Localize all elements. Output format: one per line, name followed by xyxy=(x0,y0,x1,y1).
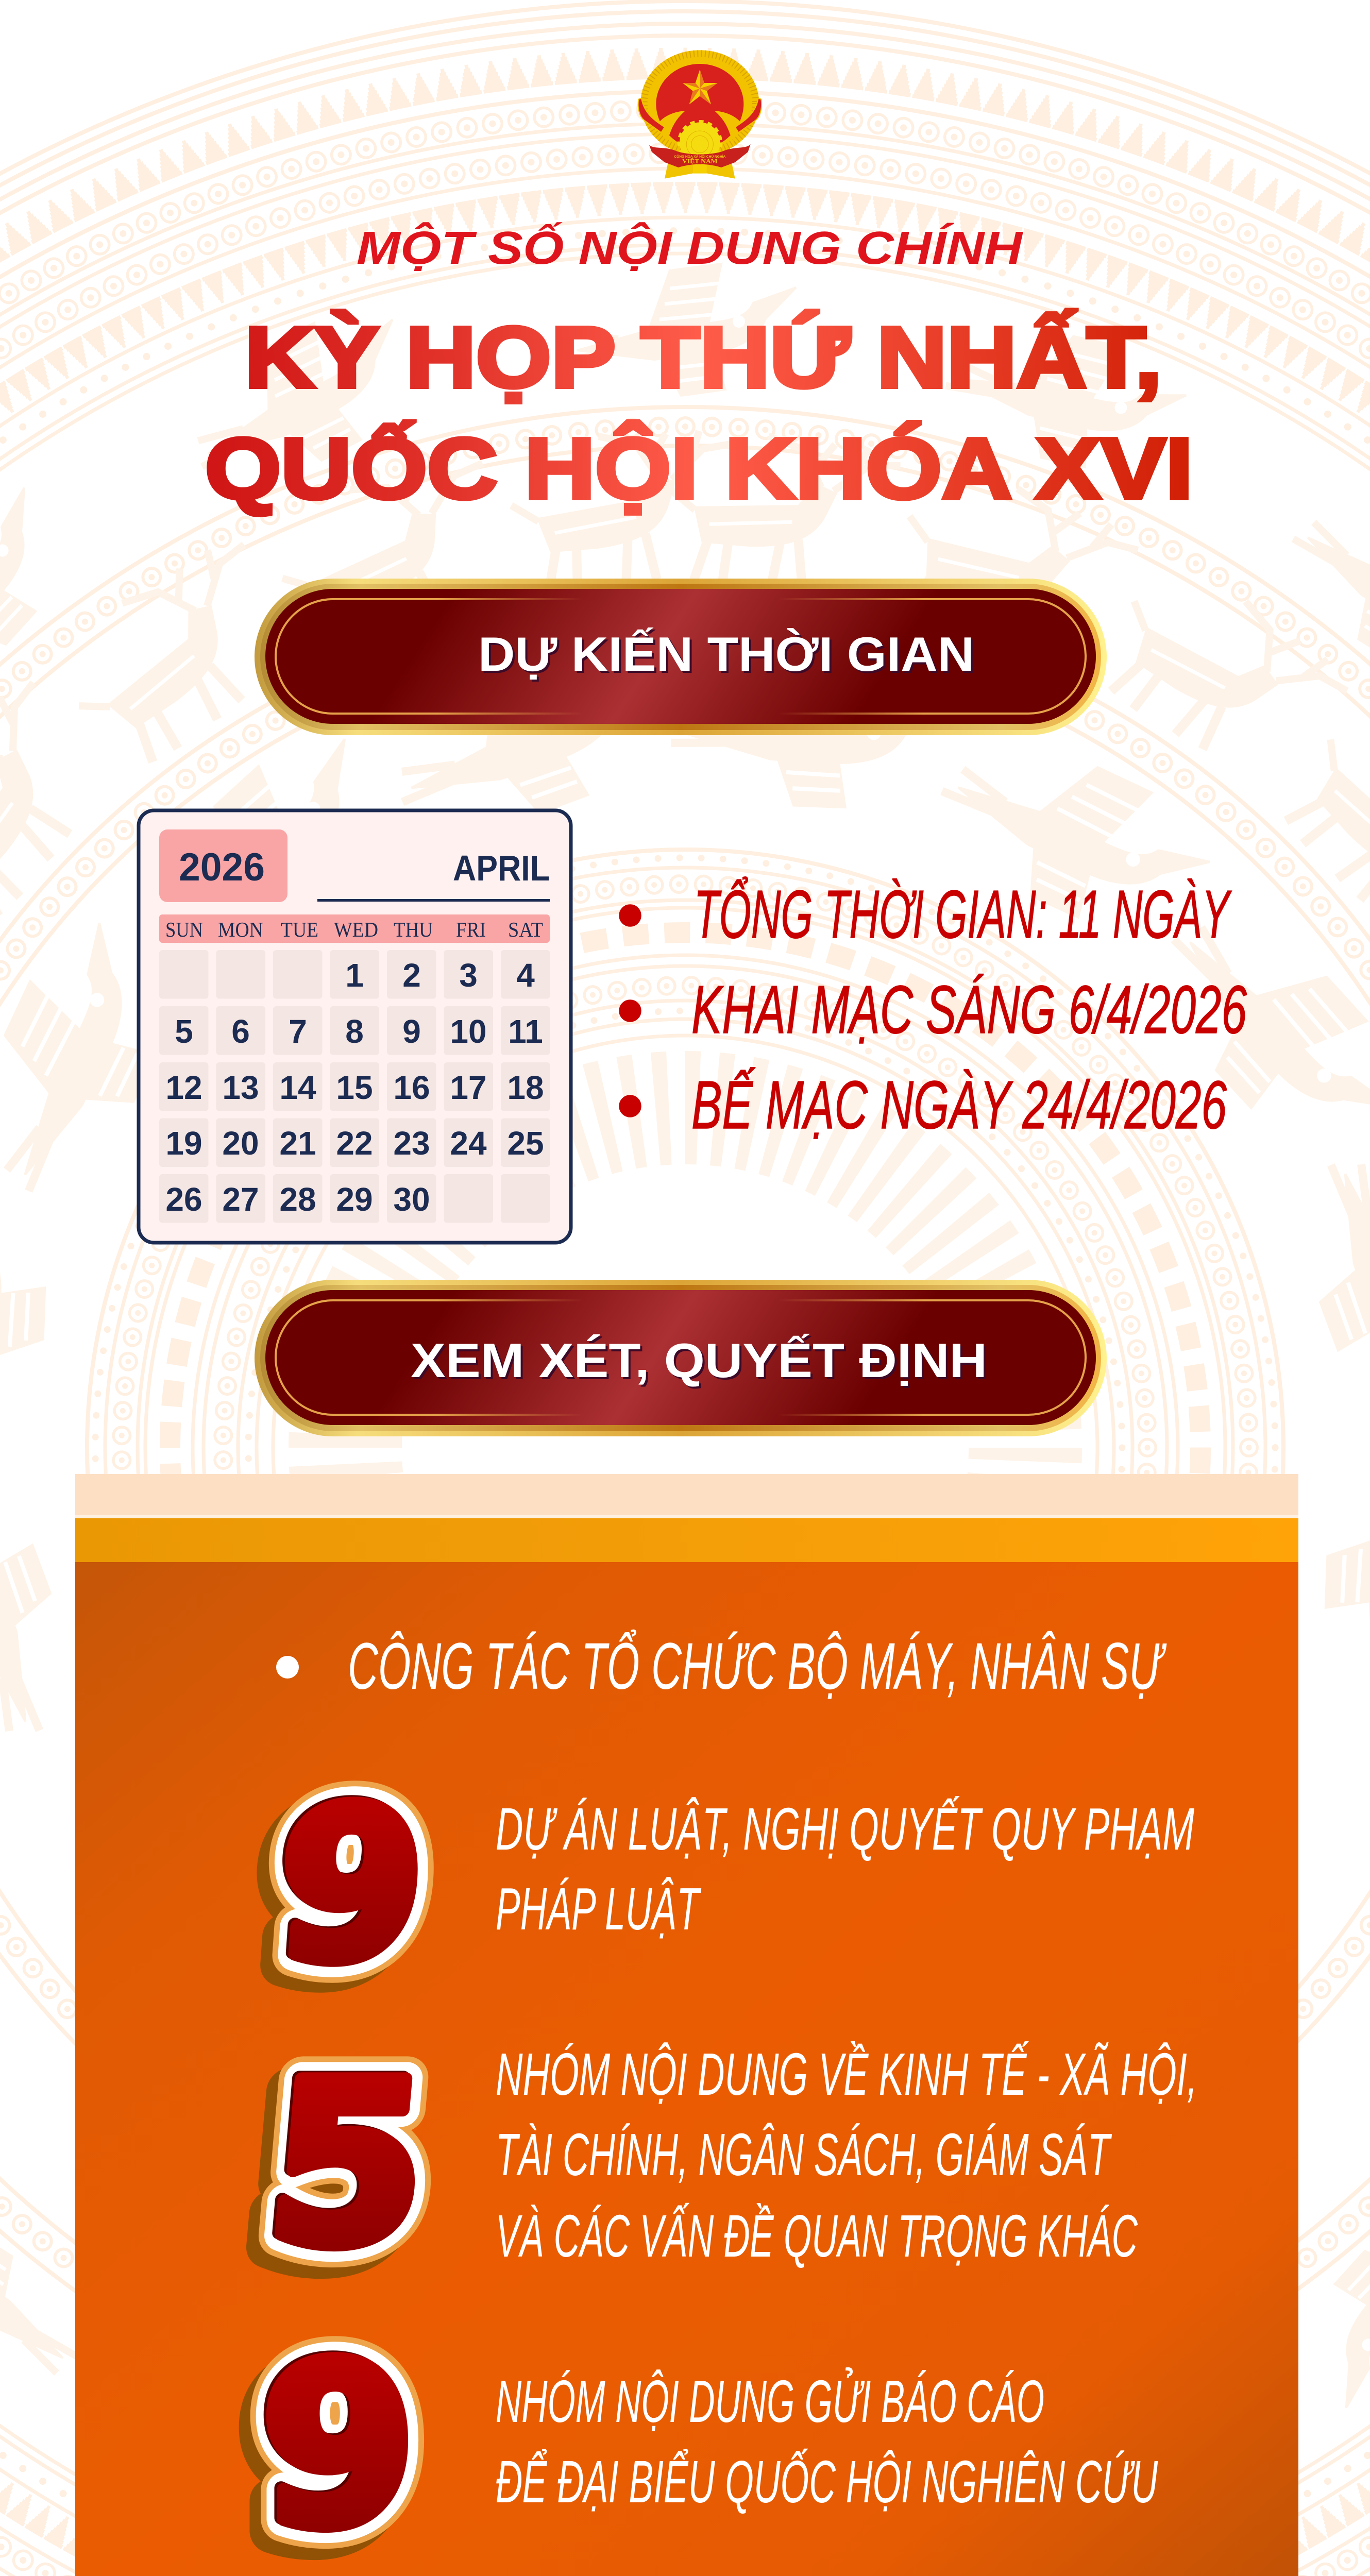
day numbers: 24 xyxy=(450,1125,487,1162)
day numbers: 17 xyxy=(450,1069,487,1106)
weekday header xyxy=(159,914,550,943)
day numbers: 4 xyxy=(516,957,535,994)
title: KỲ HỌP THỨ NHẤT, xyxy=(245,310,1162,405)
section banner: review and decide: XEM XÉT, QUYẾT ĐỊNH xyxy=(413,1335,989,1389)
icon: national emblem of Vietnam xyxy=(638,50,762,179)
day numbers: 25 xyxy=(507,1125,544,1162)
text: report groups xyxy=(496,2367,1158,2515)
numeral 9: draft laws: 9 xyxy=(270,1765,432,2007)
section banner: timing xyxy=(255,579,1107,735)
section banner: review and decide xyxy=(255,1280,1107,1436)
day numbers: 20 xyxy=(222,1125,259,1162)
day numbers: 26 xyxy=(165,1181,202,1218)
day numbers: 30 xyxy=(393,1181,430,1218)
weekday header: MON xyxy=(218,918,263,941)
day numbers: 22 xyxy=(336,1125,373,1162)
year tag xyxy=(159,829,287,902)
day numbers: 18 xyxy=(507,1069,544,1106)
day numbers: 10 xyxy=(450,1013,487,1050)
day numbers: 23 xyxy=(393,1125,430,1162)
numeral 9: report groups: 9 xyxy=(261,2318,416,2575)
section banner: timing: DỰ KIẾN THỜI GIAN xyxy=(480,629,976,683)
numeral 5: socio-economic groups: 5 xyxy=(259,2035,437,2295)
section banner: review and decide: XEM XÉT, QUYẾT ĐỊNH xyxy=(411,1333,987,1387)
day numbers: 13 xyxy=(222,1069,259,1106)
day numbers: 8 xyxy=(345,1013,364,1050)
day numbers: 1 xyxy=(345,957,364,994)
text: draft laws xyxy=(496,1795,1194,1942)
month label xyxy=(317,848,550,902)
day numbers: 6 xyxy=(231,1013,250,1050)
day numbers: 11 xyxy=(508,1013,543,1050)
day numbers: 7 xyxy=(289,1013,307,1050)
day numbers xyxy=(165,957,544,1218)
day cells xyxy=(159,950,550,1223)
weekday header: THU xyxy=(394,918,433,941)
day numbers: 21 xyxy=(279,1125,316,1162)
day numbers: 2 xyxy=(402,957,421,994)
numeral 9: report groups: 9 xyxy=(259,2316,413,2574)
numeral 9: report groups: 9 xyxy=(261,2318,416,2575)
day numbers: 3 xyxy=(459,957,478,994)
timing bullet list xyxy=(619,876,1247,1143)
day numbers: 27 xyxy=(222,1181,259,1218)
numeral 9: draft laws: 9 xyxy=(259,1774,420,2016)
year tag: 2026 xyxy=(179,845,265,889)
day numbers: 29 xyxy=(336,1181,373,1218)
numeral 5: socio-economic groups: 5 xyxy=(257,2033,434,2293)
numeral 9: draft laws: 9 xyxy=(268,1763,430,2005)
subtitle: MỘT SỐ NỘI DUNG CHÍNH xyxy=(357,222,1023,274)
title xyxy=(205,310,1193,517)
numeral 9: report groups: 9 xyxy=(261,2318,416,2575)
numeral 5: socio-economic groups: 5 xyxy=(259,2035,437,2295)
section banner: timing: DỰ KIẾN THỜI GIAN xyxy=(478,627,974,681)
icon: national emblem of Vietnam: CỘNG HÒA XÃ HỘI CHỦ NGHĨA xyxy=(674,154,726,159)
day numbers: 14 xyxy=(279,1069,316,1106)
calendar card xyxy=(139,810,571,1243)
month label: APRIL xyxy=(453,848,550,888)
day numbers: 5 xyxy=(175,1013,193,1050)
day numbers: 16 xyxy=(393,1069,430,1106)
title: QUỐC HỘI KHÓA XVI xyxy=(205,421,1193,517)
weekday header: TUE xyxy=(281,918,318,941)
day numbers: 15 xyxy=(336,1069,373,1106)
numeral 9: draft laws: 9 xyxy=(270,1765,432,2007)
text: draft laws: PHÁP LUẬT xyxy=(496,1875,701,1942)
day numbers: 19 xyxy=(165,1125,202,1162)
numeral 5: socio-economic groups: 5 xyxy=(246,2046,425,2306)
weekday header: FRI xyxy=(456,918,486,941)
weekday header: SAT xyxy=(508,918,543,941)
day numbers: 9 xyxy=(402,1013,421,1050)
panel: decisions xyxy=(75,1474,1298,2576)
icon: national emblem of Vietnam: VIỆT NAM xyxy=(682,158,718,165)
numeral 9: draft laws: 9 xyxy=(270,1765,432,2007)
weekday header: SUN xyxy=(165,918,203,941)
day numbers: 12 xyxy=(165,1069,202,1106)
weekday header: WED xyxy=(334,918,378,941)
numeral 5: socio-economic groups: 5 xyxy=(259,2035,437,2295)
text: socio-economic groups xyxy=(496,2041,1197,2269)
day numbers: 28 xyxy=(279,1181,316,1218)
